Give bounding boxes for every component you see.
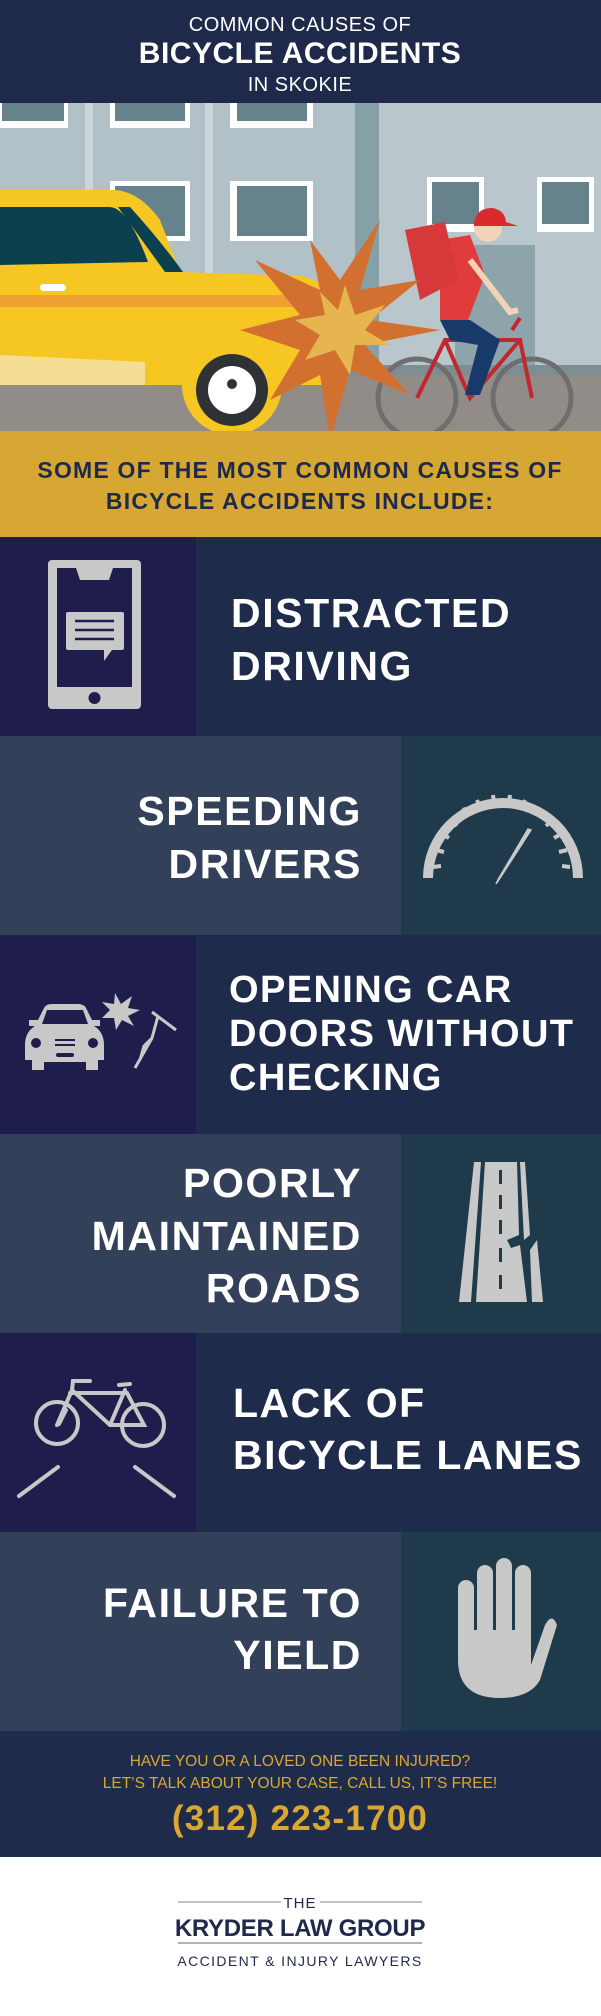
icon: cracked road bbox=[459, 1162, 543, 1302]
panel: poorly maintained roads: MAINTAINED bbox=[92, 1213, 362, 1259]
panel: failure to yield bbox=[0, 1532, 601, 1731]
panel: poorly maintained roads: ROADS bbox=[206, 1265, 362, 1311]
banner: intro: SOME OF THE MOST COMMON CAUSES OF bbox=[37, 457, 563, 483]
icon: speedometer bbox=[423, 795, 583, 884]
panel: distracted driving: DISTRACTED bbox=[231, 590, 511, 636]
banner: intro: BICYCLE ACCIDENTS INCLUDE: bbox=[106, 488, 494, 514]
header: BICYCLE ACCIDENTS bbox=[139, 37, 461, 70]
panel: poorly maintained roads bbox=[0, 1134, 601, 1333]
icon: stop hand bbox=[458, 1558, 557, 1698]
callout: call to action: (312) 223-1700 bbox=[172, 1799, 428, 1838]
panel: distracted driving: DRIVING bbox=[231, 643, 413, 689]
panel: speeding drivers: DRIVERS bbox=[169, 841, 362, 887]
illustration: car hitting cyclist bbox=[0, 103, 601, 440]
banner: intro bbox=[0, 431, 601, 537]
panel: opening car doors: CHECKING bbox=[229, 1057, 443, 1099]
panel: lack of bicycle lanes: LACK OF bbox=[233, 1380, 426, 1426]
header: IN SKOKIE bbox=[248, 74, 352, 96]
panel: opening car doors bbox=[0, 935, 601, 1134]
panel: opening car doors: OPENING CAR bbox=[229, 969, 513, 1011]
header bbox=[0, 0, 601, 103]
panel: speeding drivers: SPEEDING bbox=[137, 788, 362, 834]
explosion bbox=[240, 220, 440, 440]
header: COMMON CAUSES OF bbox=[189, 14, 411, 36]
footer logo: ACCIDENT & INJURY LAWYERS bbox=[177, 1953, 423, 1969]
panel: lack of bicycle lanes bbox=[0, 1333, 601, 1532]
callout: call to action: LET’S TALK ABOUT YOUR CASE, CALL US, IT’S FREE! bbox=[103, 1775, 497, 1792]
car bbox=[0, 190, 330, 385]
cyclist bbox=[378, 359, 571, 437]
panel: distracted driving bbox=[0, 537, 601, 736]
icon: bicycle with lane lines bbox=[19, 1381, 174, 1496]
callout: call to action: HAVE YOU OR A LOVED ONE BEEN INJURED? bbox=[130, 1753, 471, 1770]
footer logo: THE bbox=[284, 1895, 316, 1912]
panel: lack of bicycle lanes: BICYCLE LANES bbox=[233, 1432, 583, 1478]
callout: call to action bbox=[0, 1731, 601, 1857]
footer logo bbox=[175, 1895, 425, 1969]
icon: car and dooring bbox=[25, 993, 176, 1070]
panel: speeding drivers bbox=[0, 736, 601, 935]
footer logo: KRYDER LAW GROUP bbox=[175, 1915, 425, 1942]
panel: failure to yield: YIELD bbox=[233, 1632, 362, 1678]
icon: phone bbox=[48, 560, 141, 709]
panel: poorly maintained roads: POORLY bbox=[183, 1160, 362, 1206]
panel: opening car doors: DOORS WITHOUT bbox=[229, 1013, 574, 1055]
panel: failure to yield: FAILURE TO bbox=[103, 1580, 362, 1626]
